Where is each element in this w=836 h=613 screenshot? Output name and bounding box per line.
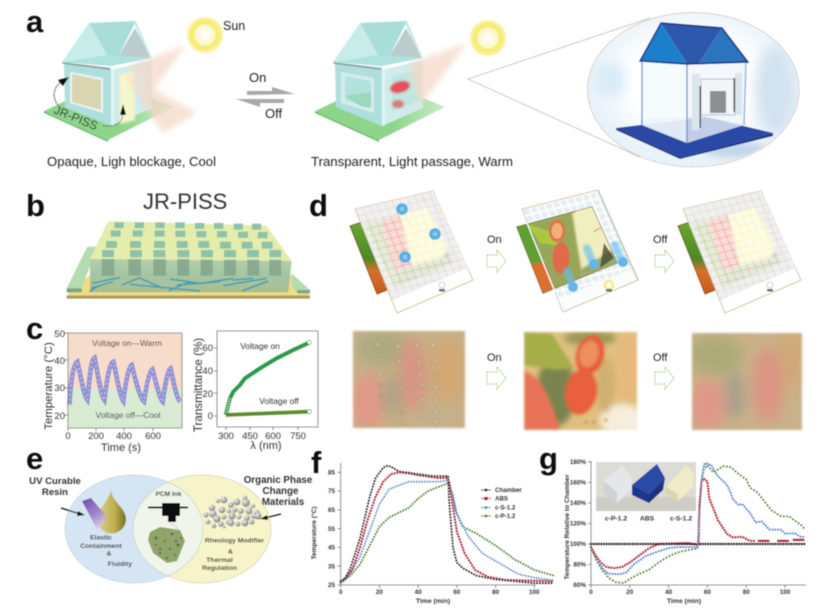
display on diagram xyxy=(517,190,638,312)
c-S-1.2 series xyxy=(591,463,804,574)
chart: transmittance xyxy=(192,331,318,452)
device illustration xyxy=(67,221,310,299)
panel label a: a xyxy=(26,4,44,39)
chart: relative temperature: 160% xyxy=(570,480,586,487)
light beams xyxy=(123,45,197,133)
chart: temperature curves: Time (min) xyxy=(416,598,450,605)
panel label g: g xyxy=(539,441,558,476)
panel: c xyxy=(26,311,318,454)
zoom lines xyxy=(468,18,650,157)
chart: transmittance: 40 xyxy=(202,366,213,377)
chart: temperature curves: 20 xyxy=(376,589,383,596)
arrow: resin xyxy=(61,508,85,516)
switch arrows xyxy=(236,87,295,107)
icon: print head xyxy=(148,503,188,522)
legend: Chamber xyxy=(495,487,522,494)
chart: relative temperature: Time (min) xyxy=(667,598,701,605)
icon: resin sheet and drop xyxy=(82,489,126,534)
chart: temperature cycling: Voltage off—Cool xyxy=(95,410,161,420)
legend: c-P-1.2 xyxy=(495,513,516,520)
chart: temperature curves: 35 xyxy=(328,563,335,570)
label: off row 2: Off xyxy=(653,352,668,364)
label: off: Off xyxy=(265,106,282,121)
photo callout: blue house xyxy=(588,13,799,167)
panel label b: b xyxy=(26,188,45,223)
label: rheology: Rheology Modifier xyxy=(205,538,264,544)
chart: relative temperature: 60 xyxy=(704,589,711,596)
chart: temperature cycling: 30 xyxy=(54,383,65,394)
title: JR-PISS: JR-PISS xyxy=(143,189,227,214)
label: on row 2: On xyxy=(487,352,502,364)
chart: temperature cycling: Voltage on—Warm xyxy=(92,338,162,348)
label: rheology: & xyxy=(228,548,233,556)
label: organic phase change materials: Materials xyxy=(262,497,305,508)
label: on: On xyxy=(249,70,266,85)
legend: c-S-1.2 xyxy=(495,504,516,512)
display off diagram xyxy=(350,191,473,313)
chart: relative temperature: 40 xyxy=(665,589,673,596)
chart: temperature cycling: Time (s) xyxy=(101,442,141,454)
chart: transmittance: 60 xyxy=(202,343,213,354)
chart: transmittance: λ (nm) xyxy=(250,440,282,452)
chart: temperature curves: 55 xyxy=(328,526,335,533)
chart: relative temperature: 0 xyxy=(589,589,593,596)
panel label c: c xyxy=(26,311,43,346)
label: elastic: Containment xyxy=(80,543,122,550)
panel label e: e xyxy=(26,441,43,476)
droplets: off xyxy=(396,203,441,263)
inset labels: c-P-1.2 xyxy=(605,516,627,522)
icon: sun 2 xyxy=(468,18,508,58)
chart: relative temperature: 60% xyxy=(573,582,586,589)
house: transparent state xyxy=(315,21,445,142)
chart: relative temperature: 80% xyxy=(573,562,586,569)
label: on: On xyxy=(487,234,502,246)
chart: temperature cycling: 50 xyxy=(54,329,65,340)
chart: temperature cycling: 400 xyxy=(116,431,132,442)
chart: temperature curves: 45 xyxy=(328,545,335,552)
chart: relative temperature xyxy=(564,459,806,605)
chart: transmittance: Voltage off xyxy=(259,396,299,406)
chart: temperature cycling: 20 xyxy=(54,411,65,422)
ABS series xyxy=(341,472,554,581)
chart: relative temperature: 80 xyxy=(743,589,750,596)
caption: opaque: Opaque, Ligh blockage, Cool xyxy=(47,154,216,169)
panel label d: d xyxy=(309,188,328,223)
chart: transmittance: Transmittance (%) xyxy=(192,338,205,432)
label: UV curable resin: UV Curable xyxy=(29,476,81,487)
icon: printed structure xyxy=(148,523,185,563)
chart: temperature cycling: 40 xyxy=(54,356,65,367)
inset labels xyxy=(605,516,692,522)
chart: transmittance: 750 xyxy=(290,431,306,442)
chart: temperature cycling: 0 xyxy=(65,431,71,442)
c-P-1.2 series xyxy=(341,484,554,583)
chart: relative temperature: 20 xyxy=(626,589,634,596)
chart: transmittance: 600 xyxy=(265,431,281,442)
label: elastic: Fluidity xyxy=(108,561,132,568)
chart: temperature curves: 65 xyxy=(328,507,335,514)
chart: temperature cycling: Temperature (°C) xyxy=(43,342,55,430)
chart: temperature curves: 85 xyxy=(328,470,335,476)
label: rheology: Thermal xyxy=(206,557,233,564)
label: elastic: & xyxy=(107,550,112,558)
panel label f: f xyxy=(311,445,322,480)
chart: temperature curves: 40 xyxy=(415,589,422,596)
panel: a xyxy=(26,4,799,169)
chart: transmittance: 0 xyxy=(208,411,213,422)
label: off: Off xyxy=(653,234,668,246)
house: opaque state xyxy=(44,21,174,142)
chamber baseline xyxy=(591,543,804,545)
photo: display off after xyxy=(687,332,806,431)
chamber series xyxy=(341,466,554,583)
venn diagram xyxy=(65,475,271,583)
photo: display off with droplets xyxy=(350,331,466,430)
chart: relative temperature: 120% xyxy=(570,521,586,528)
label: organic phase change materials: Change xyxy=(263,486,299,497)
arrow: off row 2 xyxy=(655,367,674,389)
light beam xyxy=(408,43,467,106)
chart: temperature curves: 75 xyxy=(328,488,335,495)
chart: temperature curves: 25 xyxy=(328,582,335,589)
arrow: organic xyxy=(260,514,281,520)
chart: transmittance: 300 xyxy=(218,431,234,442)
legend: ABS xyxy=(495,496,508,502)
label: sun: Sun xyxy=(223,19,245,33)
chart: temperature cycling xyxy=(43,329,182,454)
chart: temperature cycling: 600 xyxy=(145,431,161,442)
label: elastic: Elastic xyxy=(90,534,112,542)
inset labels: ABS xyxy=(640,516,655,522)
arrow: on row 2 xyxy=(487,367,506,389)
inset photo: printed houses xyxy=(596,462,696,511)
c-P-1.2 series xyxy=(591,465,804,583)
panel: g xyxy=(539,441,806,605)
chart: relative temperature: Temperature Relative to Chamber xyxy=(564,474,571,580)
label: PCM ink: PCM Ink xyxy=(155,491,182,498)
chart: relative temperature: 140% xyxy=(570,500,586,507)
chart: temperature curves: 100 xyxy=(529,589,540,596)
panel: b xyxy=(26,188,310,299)
chart: temperature curves: Temperature (°C) xyxy=(310,506,318,560)
label: UV curable resin: Resin xyxy=(42,487,68,498)
c-S-1.2 series xyxy=(341,481,554,582)
chart: transmittance: 20 xyxy=(202,389,213,400)
label: organic phase change materials: Organic Phase xyxy=(244,475,313,486)
inset labels: c-S-1.2 xyxy=(670,516,692,522)
ABS series xyxy=(591,478,756,568)
photo: display on xyxy=(524,330,644,436)
legend xyxy=(481,487,522,520)
JR-PISS label with arrows xyxy=(52,77,126,133)
chart: transmittance: 450 xyxy=(242,431,258,442)
panel: d xyxy=(309,188,806,436)
display off again diagram xyxy=(678,191,801,313)
chart: temperature curves: 80 xyxy=(492,589,500,596)
icon: sun xyxy=(186,16,224,54)
chart: transmittance: Voltage on xyxy=(240,341,280,351)
caption: transparent: Transparent, Light passage, Warm xyxy=(311,154,513,169)
panel: f xyxy=(310,445,554,605)
label: rheology: Regulation xyxy=(202,565,237,572)
chart: temperature curves: 0 xyxy=(339,589,343,596)
icon: spheres xyxy=(203,496,262,528)
arrow: on xyxy=(487,250,506,272)
chart: temperature cycling: 200 xyxy=(88,431,104,442)
chart: relative temperature: 100% xyxy=(570,541,586,548)
chart: temperature curves: 60 xyxy=(453,589,461,596)
chart: relative temperature: 180% xyxy=(570,459,586,466)
arrow: off xyxy=(655,250,674,272)
panel: e xyxy=(26,441,313,583)
chart: temperature curves xyxy=(310,463,554,605)
JR-PISS label with arrows: JR-PISS xyxy=(52,103,100,133)
chart: relative temperature: 100 xyxy=(780,589,791,596)
